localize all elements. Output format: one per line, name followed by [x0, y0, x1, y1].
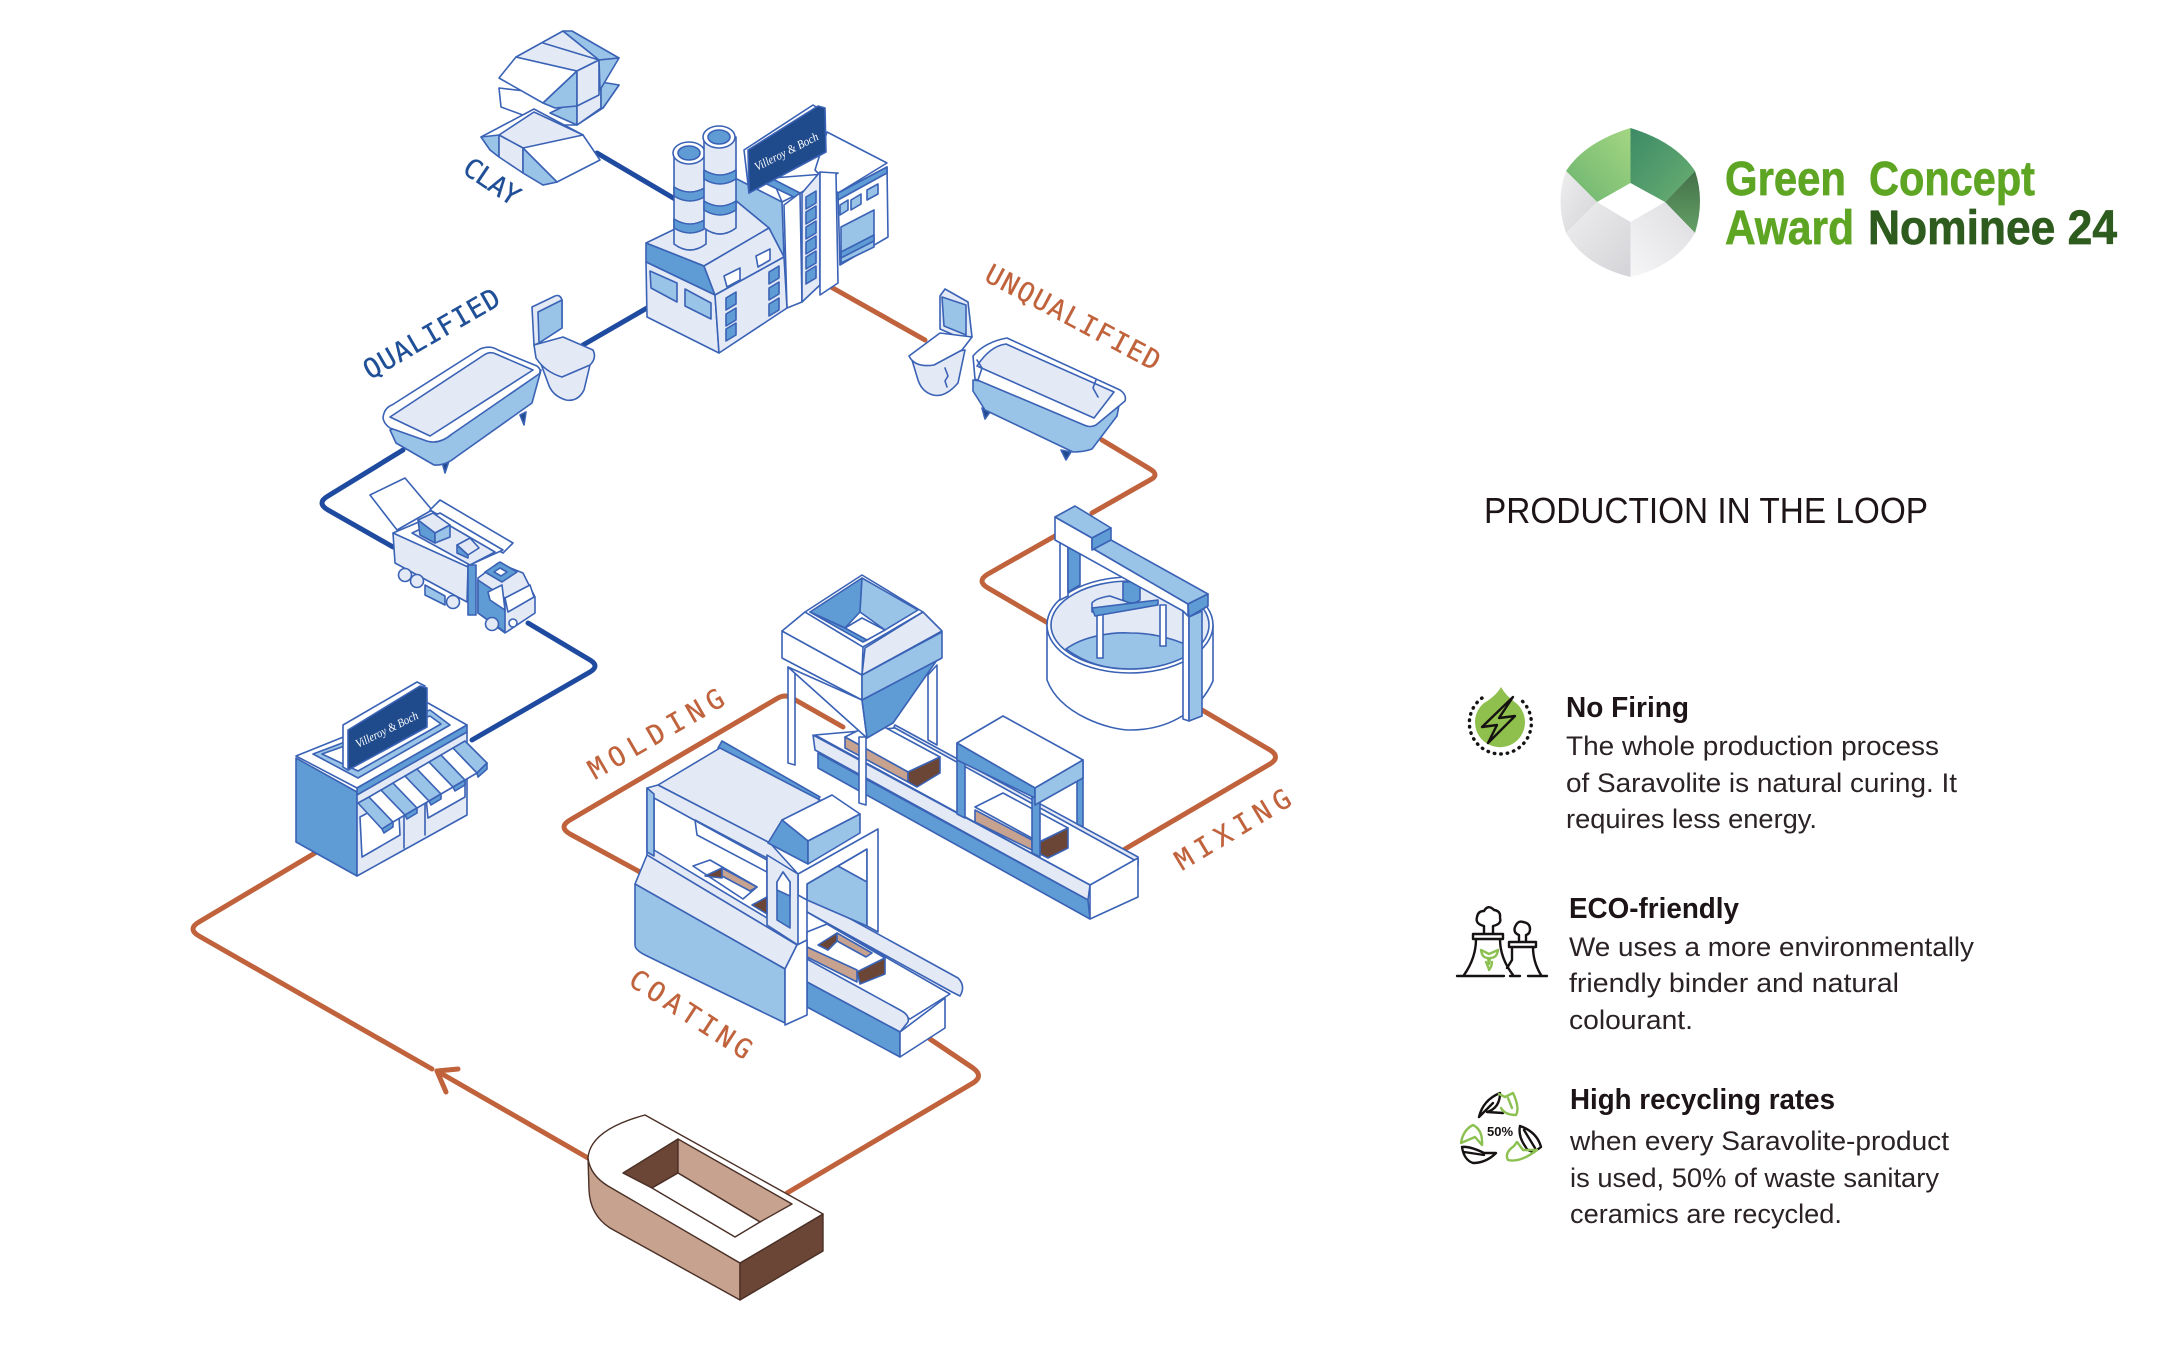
label: molding: MOLDING: [583, 683, 730, 786]
machine base: [635, 855, 807, 1025]
text block: high recycling rates: is used, 50% of waste sanitary: [1570, 1163, 1940, 1193]
inner moulds: [693, 860, 767, 914]
gantry beam: [1055, 506, 1208, 617]
left column: [1060, 540, 1080, 600]
hopper: [782, 575, 942, 805]
icon: coating machine: [635, 741, 963, 1057]
icon: unqualified toilet: [909, 289, 972, 396]
label: coating: COATING: [623, 964, 757, 1066]
text block: eco-friendly: colourant.: [1569, 1005, 1693, 1035]
icon: delivery truck: [370, 478, 535, 633]
award title: Award: [1725, 202, 1854, 255]
icon: qualified bathtub: [383, 347, 541, 473]
right column: [1183, 611, 1202, 721]
text block: no firing: [1566, 692, 1958, 834]
text block: eco-friendly: [1569, 893, 1975, 1035]
icon: qualified toilet: [532, 296, 594, 400]
text block: no firing: The whole production process: [1566, 731, 1939, 761]
heading: production in the loop: PRODUCTION IN THE LOOP: [1484, 490, 1928, 531]
text block: high recycling rates: High recycling rates: [1570, 1084, 1835, 1116]
text block: high recycling rates: [1569, 1084, 1950, 1229]
label: mixing: MIXING: [1170, 783, 1297, 877]
text block: no firing: No Firing: [1566, 692, 1689, 724]
cab: [468, 562, 535, 633]
cargo boxes: [418, 513, 479, 558]
chimney right: [703, 126, 736, 234]
icon: shop: [296, 682, 487, 876]
icon: eco cooling towers: [1457, 907, 1547, 976]
award title: Nominee 24: [1868, 202, 2117, 255]
factory sign: [744, 105, 826, 193]
icon: no firing: [1469, 687, 1531, 754]
text block: eco-friendly: ECO-friendly: [1569, 893, 1739, 925]
awning: [358, 741, 487, 833]
central tower: [735, 170, 838, 308]
icon: unqualified bathtub: [973, 338, 1125, 460]
window frame: [647, 785, 798, 945]
chimney left: [673, 142, 706, 250]
icon: factory: [646, 105, 888, 353]
wheels: [398, 568, 517, 630]
shop sign: Villeroy & Boch: [353, 708, 420, 751]
label: qualified: QUALIFIED: [358, 283, 506, 386]
award title: Green: [1725, 153, 1846, 206]
text block: high recycling rates: when every Saravolite-product: [1569, 1126, 1950, 1156]
blue loop path: clay and products to shop: [322, 153, 675, 740]
award title: [1725, 153, 2117, 255]
text block: eco-friendly: We uses a more environmentally: [1569, 932, 1975, 962]
tank: [1047, 577, 1213, 730]
award title: Concept: [1869, 153, 2035, 206]
factory sign: Villeroy & Boch: [752, 129, 821, 174]
conveyor: [813, 725, 1138, 919]
output block: [807, 924, 885, 984]
label: unqualified: UNQUALIFIED: [980, 259, 1166, 377]
text block: high recycling rates: ceramics are recycled.: [1570, 1199, 1842, 1229]
text block: no firing: requires less energy.: [1566, 804, 1817, 834]
logo: green concept leaf: [1560, 128, 1700, 277]
brown loop path: recycling of unqualified products: [193, 287, 1276, 1193]
icon: recycling leaves 50%: [1461, 1093, 1541, 1163]
gantry: [957, 716, 1083, 858]
text block: no firing: of Saravolite is natural curing. It: [1566, 768, 1958, 798]
stirrer: [1092, 582, 1166, 658]
shop sign: [343, 682, 427, 770]
icon: large mould: [588, 1115, 823, 1300]
text block: eco-friendly: friendly binder and natural: [1569, 968, 1899, 998]
icon: clay blocks: [481, 31, 619, 185]
block 1: [845, 722, 940, 787]
icon: mixer: [1047, 506, 1213, 730]
icon: hopper conveyor: [782, 575, 1138, 919]
top deck: [658, 741, 820, 843]
main hall: [646, 200, 787, 353]
back building: [815, 132, 888, 265]
output conveyor: [807, 895, 963, 1057]
icon: recycling leaves 50%: 50%: [1487, 1124, 1513, 1139]
head box: [768, 795, 860, 864]
label: clay: CLAY: [457, 152, 526, 212]
arch frame: [798, 829, 878, 932]
